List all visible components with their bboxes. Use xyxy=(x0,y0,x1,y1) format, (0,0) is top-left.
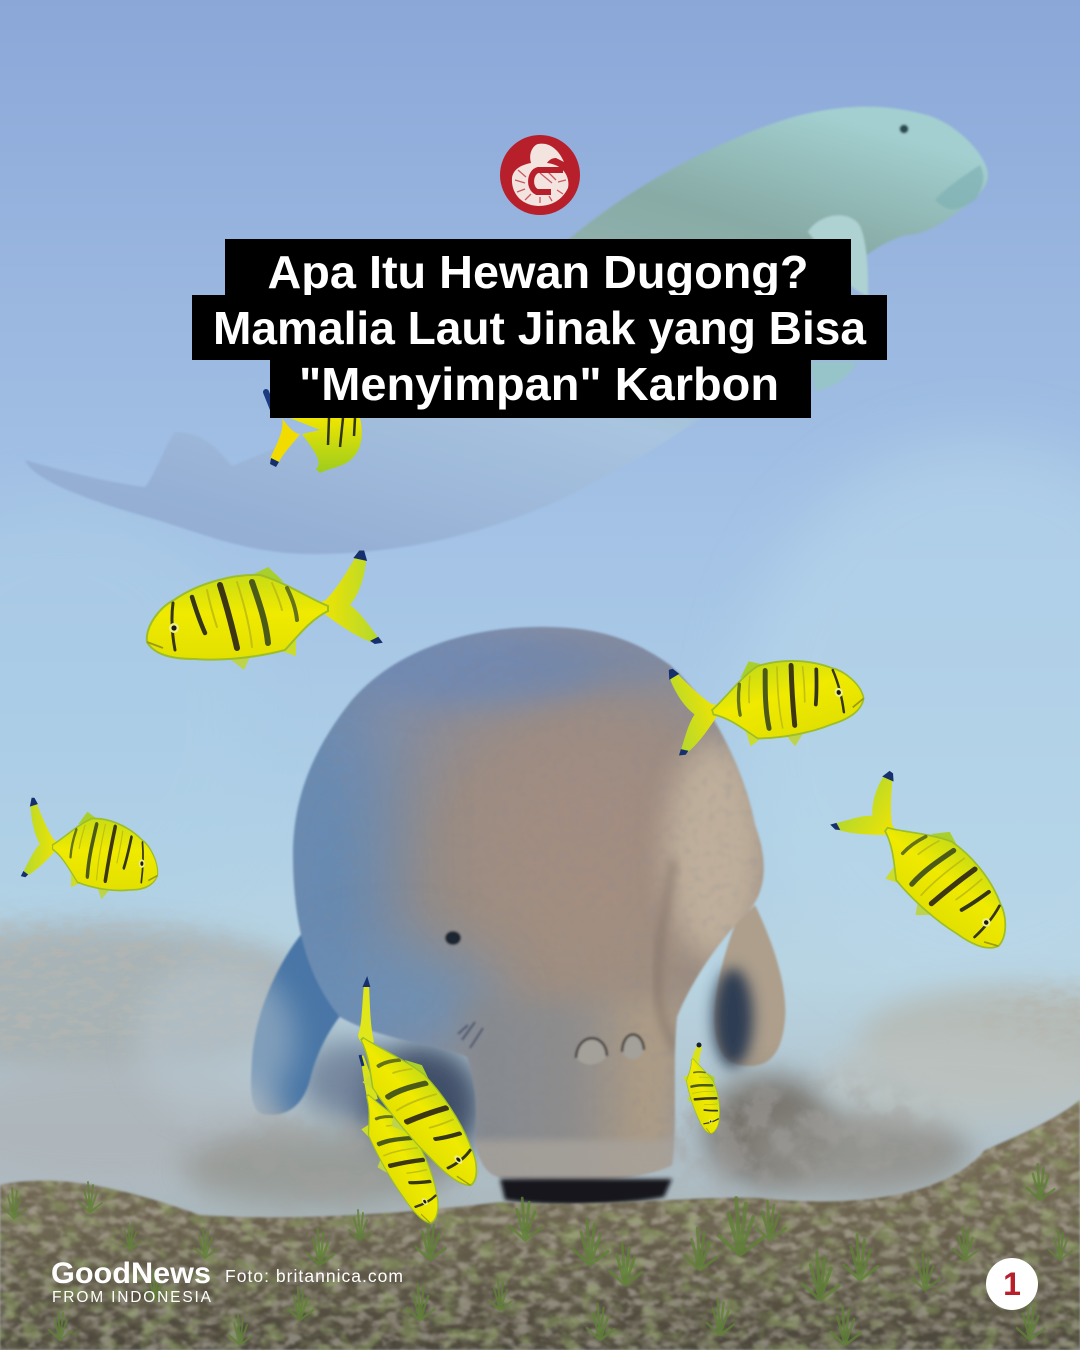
distant dugong flipper xyxy=(808,215,868,296)
fish behind title xyxy=(266,392,362,473)
title line 1: Apa Itu Hewan Dugong? xyxy=(268,246,808,298)
foreground dugong xyxy=(251,625,785,1190)
brand: GoodNews from Indonesia xyxy=(51,1257,212,1306)
brand: GoodNews from Indonesia: FROM INDONESIA xyxy=(52,1289,212,1306)
eye xyxy=(445,931,461,945)
title line 2: Mamalia Laut Jinak yang Bisa xyxy=(213,302,866,354)
fish: right, near dugong back xyxy=(656,619,871,779)
fish: right, diving xyxy=(818,763,1044,965)
background light haze xyxy=(0,440,1080,1000)
fish: small by snout xyxy=(674,1042,734,1137)
right flipper inner shadow xyxy=(713,968,753,1068)
title block xyxy=(192,239,887,418)
logo: red eagle G badge xyxy=(500,135,580,215)
distant dugong tail and body xyxy=(25,107,988,554)
seagrass tufts xyxy=(3,1164,1072,1345)
page number badge: 1 xyxy=(1003,1266,1021,1302)
logo ring xyxy=(512,144,568,206)
nostrils xyxy=(576,1034,644,1065)
fish: main upper left xyxy=(147,552,381,670)
brand: GoodNews from Indonesia: GoodNews xyxy=(51,1257,211,1290)
photo credit: Foto: britannica.com xyxy=(225,1266,403,1286)
left flipper xyxy=(251,932,345,1115)
grassy sea floor xyxy=(0,1100,1080,1350)
dark shadow under snout xyxy=(500,1179,672,1205)
sediment clouds xyxy=(0,960,1080,1240)
body xyxy=(293,627,764,1182)
distant dugong swimming at the surface xyxy=(25,107,988,554)
logo G letter xyxy=(531,170,563,192)
distant dugong lower flipper xyxy=(810,362,857,391)
fish: far left xyxy=(22,799,158,899)
right flipper xyxy=(714,905,785,1066)
distant dugong eye xyxy=(900,124,908,134)
distant dugong snout shade xyxy=(935,165,983,209)
far sea floor and haze xyxy=(0,860,1080,1140)
mouth wrinkles xyxy=(458,1022,483,1048)
title line 3: "Menyimpan" Karbon xyxy=(299,358,779,410)
body shading xyxy=(275,625,770,1190)
page number badge xyxy=(986,1258,1038,1310)
dark shadow under dugong xyxy=(300,1040,482,1167)
fish: bottom, second xyxy=(342,1055,462,1231)
fish: bottom, front xyxy=(334,979,505,1197)
